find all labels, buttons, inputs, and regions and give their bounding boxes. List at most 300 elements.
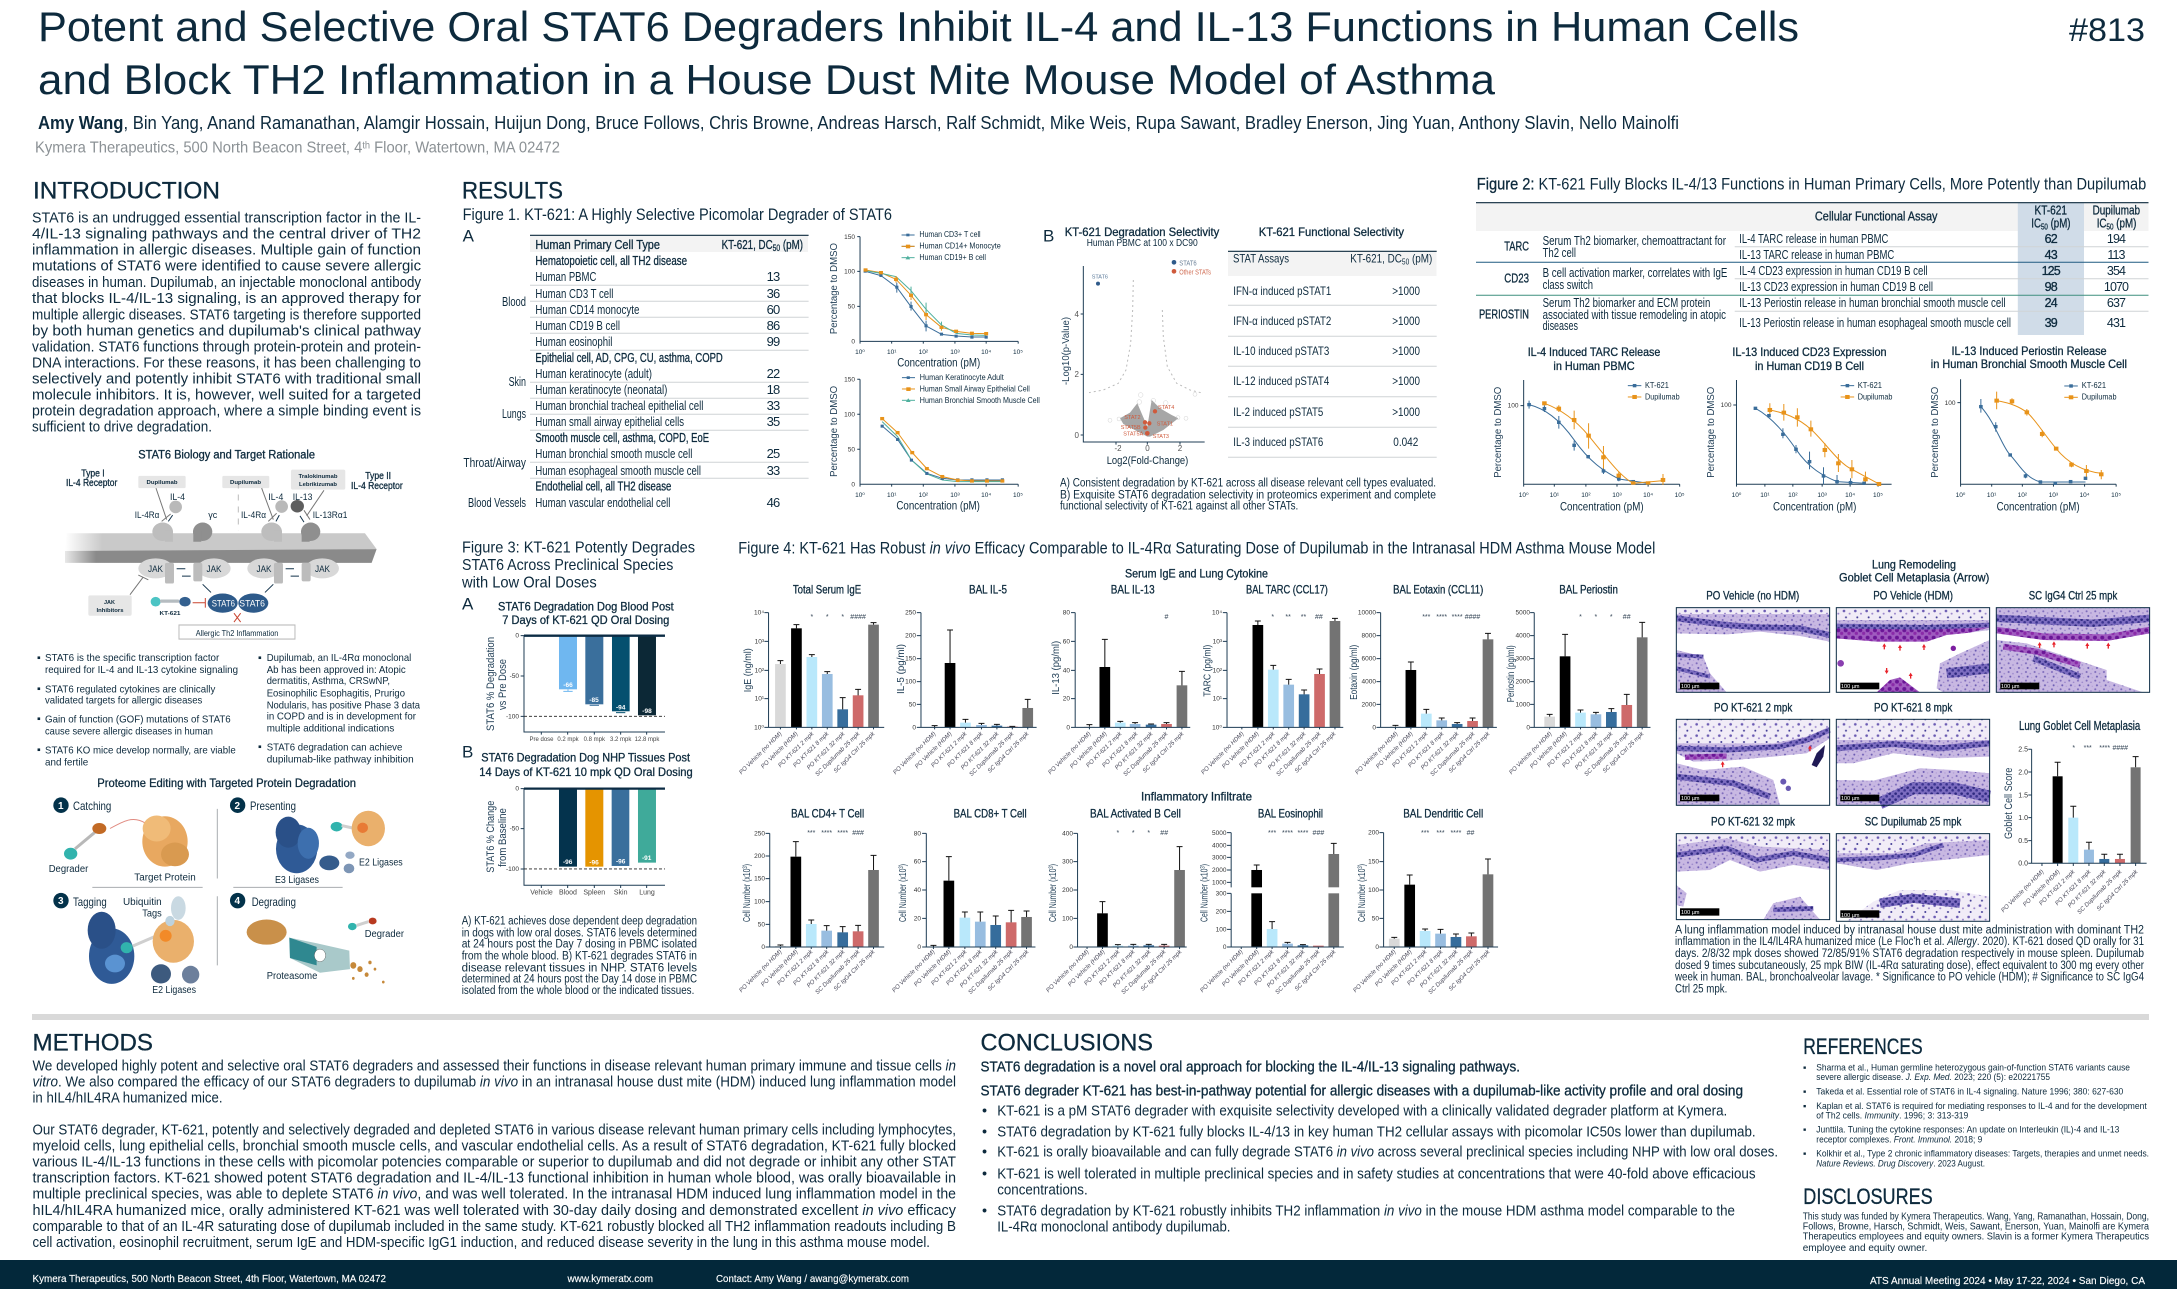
reference list: Takeda et al. Essential role of STAT6 in IL-4 signaling. Nature 1996; 380: 627-630 <box>1816 1087 2123 1098</box>
line chart: blood cell STAT6 degradation: 150 <box>844 234 855 241</box>
affiliation: th <box>362 140 370 152</box>
bar chart: total serum IgE: SC Dupilumab 25 mpk <box>815 730 862 778</box>
diagram: proteome editing with targeted protein degradation <box>49 776 405 996</box>
bar chart: dog blood degradation: -100 <box>506 714 519 720</box>
bar chart: BAL eosinophil with broken axis: **** <box>1282 830 1293 837</box>
bar chart: BAL CD8+ T cell <box>892 806 1035 996</box>
table: human primary cell DC50: Human Primary Cell Type <box>535 237 660 252</box>
panel: conclusions <box>980 1030 1778 1236</box>
figure 3 caption: at 24 hours post the Day 7 dosing in PBMC isolated <box>462 938 697 950</box>
bullet list: STAT6 rationale: ▪ <box>37 683 41 695</box>
figure 1 caption: A) Consistent degradation by KT-621 across all disease relevant cell types evaluated. <box>1060 478 1436 490</box>
histology: PO KT-621 32 mpk: 100 µm <box>1681 910 1700 916</box>
histology: SC Dupilumab 25 mpk <box>1836 815 1990 921</box>
table: cellular functional assays: 113 <box>2107 248 2126 262</box>
table: human primary cell DC50: 36 <box>767 286 780 301</box>
bar chart: BAL CD8+ T cell: 80 <box>914 830 921 837</box>
bar chart: BAL TARC: TARC (pg/ml) <box>1202 645 1214 697</box>
line chart: IL-13 induced periostin release: 10⁴ <box>2079 492 2090 499</box>
table: functional selectivity: >1000 <box>1392 344 1420 358</box>
bullet list: STAT6 rationale: cause severe allergic diseases in human <box>45 726 213 738</box>
bar chart: BAL CD4+ T cell <box>739 806 884 996</box>
table: human primary cell DC50: KT-621, DC <box>722 237 790 252</box>
bar chart: BAL IL-5: PO KT-621 32 mpk <box>960 730 1001 771</box>
diagram: STAT6 biology and target rationale <box>65 450 403 639</box>
line chart: blood cell STAT6 degradation: Percentage to DMSO <box>829 243 840 334</box>
bar chart: BAL eotaxin: PO Vehicle (HDM) <box>1375 731 1414 770</box>
volcano plot: degradation selectivity: 0 <box>1145 444 1150 453</box>
bar chart: BAL CD4+ T cell: *** <box>807 830 816 837</box>
bar chart: BAL eotaxin: #### <box>1465 614 1480 621</box>
bar chart: BAL IL-5: 0 <box>912 724 916 731</box>
bar chart: BAL TARC: ** <box>1285 614 1291 621</box>
line chart: IL-13 induced CD23 expression <box>1706 345 1893 514</box>
diagram: STAT6 biology and target rationale: Lebrikizumab <box>299 482 338 488</box>
table: cellular functional assays: IC <box>2031 216 2044 230</box>
reference list: of Th2 cells. Immunity. 1996; 3: 313-319 <box>1816 1111 1968 1122</box>
bar chart: NHP tissue degradation: -100 <box>506 866 519 873</box>
bar chart: BAL IL-5 <box>893 582 1037 778</box>
table: functional selectivity: KT-621 Functional Selectivity <box>1259 225 1404 239</box>
histology: SC IgG4 Ctrl 25 mpk: SC IgG4 Ctrl 25 mpk <box>2029 589 2118 603</box>
methods text: myeloid cells, lung epithelial cells, bronchial smooth muscle cells, and vascular endothelial cells. As a result of STAT6 degradation, KT-621 fully blocked <box>32 1138 956 1154</box>
table: cellular functional assays: Th2 cell <box>1543 246 1576 260</box>
introduction paragraph: selectively and potently inhibit STAT6 with traditional small <box>32 371 421 387</box>
heading: lung remodeling: Goblet Cell Metaplasia (Arrow) <box>1839 571 1989 585</box>
bar chart: BAL periostin: SC IgG4 Ctrl 25 mpk <box>1602 730 1646 775</box>
bar chart: NHP tissue degradation: STAT6 Degradation Dog NHP Tissues Post <box>481 751 691 765</box>
bar chart: NHP tissue degradation: -50 <box>510 826 519 833</box>
bar chart: total serum IgE: * <box>811 614 814 621</box>
line chart: blood cell STAT6 degradation: 0 <box>851 338 855 346</box>
heading: lung remodeling <box>1839 558 1989 585</box>
bullet list: STAT6 rationale: required for IL-4 and IL-13 cytokine signaling <box>45 664 238 676</box>
figure 3 title: with Low Oral Doses <box>461 574 597 591</box>
diagram: STAT6 biology and target rationale: IL-4 Receptor <box>66 478 118 489</box>
histology: PO KT-621 2 mpk: 100 µm <box>1681 796 1700 802</box>
table: cellular functional assays: IL-13 TARC release in human PBMC <box>1739 248 1894 262</box>
introduction paragraph: sufficient to drive degradation. <box>32 419 212 435</box>
histology: PO KT-621 32 mpk <box>1676 815 1830 920</box>
bar chart: BAL dendritic cell: PO Vehicle (HDM) <box>1374 949 1413 988</box>
line chart: IL-13 induced CD23 expression: 10⁵ <box>1873 492 1883 499</box>
bar chart: BAL CD8+ T cell: PO Vehicle (no HDM) <box>892 949 936 994</box>
bar chart: BAL IL-5: PO KT-621 8 mpk <box>947 730 985 769</box>
reference list: Junttila. Tuning the cytokine responses: An update on Interleukin (IL)-4 and IL-13 <box>1816 1125 2119 1136</box>
table: cellular functional assays: IL-13 CD23 expression in human CD19 B cell <box>1739 280 1933 294</box>
diagram: STAT6 biology and target rationale: STAT6 <box>212 598 235 608</box>
histology: PO vehicle (HDM) <box>1836 589 1990 692</box>
table: human primary cell DC50: Human CD19 B cell <box>535 318 620 333</box>
table: cellular functional assays: 50 <box>2041 222 2048 231</box>
bar chart: BAL periostin: 4000 <box>1516 633 1530 640</box>
bar chart: BAL dendritic cell: 200 <box>1368 830 1379 837</box>
bar chart: BAL dendritic cell: 100 <box>1368 887 1379 894</box>
table: cellular functional assays: 1070 <box>2104 280 2129 294</box>
bar chart: BAL activated B cell: 0 <box>1069 944 1073 951</box>
line chart: IL-13 induced CD23 expression: KT-621 <box>1858 380 1882 390</box>
bar chart: BAL CD4+ T cell: PO KT-621 8 mpk <box>793 948 831 987</box>
bar chart: BAL eosinophil with broken axis: *** <box>1268 830 1276 837</box>
bar chart: total serum IgE <box>739 582 884 778</box>
panel: disclosures <box>1803 1184 2149 1254</box>
table: cellular functional assays: (pM) <box>2048 216 2070 230</box>
bar chart: NHP tissue degradation <box>479 751 693 897</box>
line chart: IL-13 induced CD23 expression: Dupilumab <box>1858 391 1893 401</box>
diagram: STAT6 biology and target rationale: IL-4Rα <box>241 510 266 520</box>
figure 3 caption: A) KT-621 achieves dose dependent deep degradation <box>462 915 697 927</box>
table: functional selectivity: IL-3 induced pSTAT6 <box>1233 435 1324 449</box>
bar chart: BAL CD4+ T cell: SC Dupilumab 25 mpk <box>815 948 862 996</box>
bar chart: lung goblet cell metaplasia: 1.5 <box>2018 792 2028 800</box>
line chart: IL-4 induced TARC release: 10² <box>1581 492 1591 499</box>
line chart: blood cell STAT6 degradation: Human CD3+ T cell <box>919 229 981 239</box>
bar chart: BAL IL-5: IL-5 (pg/ml) <box>896 644 907 694</box>
volcano plot: degradation selectivity: Log2(Fold-Change) <box>1107 455 1188 467</box>
bar chart: dog blood degradation: -94 <box>616 704 626 712</box>
table: human primary cell DC50: Human bronchial tracheal epithelial cell <box>535 398 703 413</box>
bar chart: BAL activated B cell: PO Vehicle (HDM) <box>1067 949 1106 988</box>
bar chart: BAL eotaxin: PO Vehicle (no HDM) <box>1355 731 1399 776</box>
line chart: IL-13 induced CD23 expression: Concentration (pM) <box>1773 500 1856 514</box>
heading: inflammatory infiltrate: Inflammatory Infiltrate <box>1141 790 1252 804</box>
table: cellular functional assays: 354 <box>2107 264 2126 278</box>
reference list: ▪ <box>1803 1063 1806 1074</box>
diagram: proteome editing with targeted protein degradation: 3 <box>58 896 64 907</box>
bar chart: BAL eotaxin: **** <box>1452 614 1463 621</box>
bar chart: BAL IL-13: IL-13 (pg/ml) <box>1051 641 1062 695</box>
conclusions bullet list: STAT6 degradation by KT-621 fully blocks IL-4/13 in key human TH2 cellular assays with picomolar IC50s lower than dupilumab. <box>997 1125 1756 1141</box>
bar chart: BAL eosinophil with broken axis: 300 <box>1216 890 1227 898</box>
bar chart: dog blood degradation: 7 Days of KT-621 QD Oral Dosing <box>502 613 669 627</box>
bar chart: BAL eotaxin: SC IgG4 Ctrl 25 mpk <box>1448 730 1492 775</box>
poster number: #813 <box>2069 12 2145 48</box>
introduction paragraph: molecule inhibitors. It is, however, well suited for a targeted <box>32 387 421 403</box>
bar chart: BAL TARC: 10⁰ <box>1212 724 1222 731</box>
bar chart: BAL activated B cell: Cell Number (x10³) <box>1048 864 1059 922</box>
footer bar: ATS Annual Meeting 2024 • May 17-22, 2024 • San Diego, CA <box>1870 1275 2145 1287</box>
line chart: tissue cell STAT6 degradation: Human Small Airway Epithelial Cell <box>920 383 1030 393</box>
table: functional selectivity: IL-10 induced pSTAT3 <box>1233 344 1330 358</box>
bar chart: BAL eosinophil with broken axis: **** <box>1297 830 1309 837</box>
heading: methods: METHODS <box>32 1030 153 1057</box>
bar chart: BAL periostin: SC Dupilumab 25 mpk <box>1584 730 1631 778</box>
table: cellular functional assays: IL-13 Periostin release in human esophageal smooth muscle cell <box>1739 316 2011 330</box>
conclusions bullet list: • <box>982 1167 987 1183</box>
bar chart: BAL CD4+ T cell: 250 <box>754 830 765 837</box>
heading: conclusions: CONCLUSIONS <box>980 1030 1153 1057</box>
introduction paragraph: by both human genetics and dupilumab's clinical pathway <box>32 323 422 339</box>
panel: figure 2 <box>1476 175 2148 514</box>
bar chart: lung goblet cell metaplasia: * <box>2072 745 2075 752</box>
volcano plot: degradation selectivity: 4 <box>1075 310 1080 319</box>
bar chart: BAL eosinophil with broken axis: 3000 <box>1212 854 1227 862</box>
line chart: IL-13 induced periostin release: Dupilumab <box>2082 392 2117 402</box>
introduction paragraph: STAT6 is an undrugged essential transcription factor in the IL- <box>32 210 421 226</box>
panel: methods <box>32 1030 957 1251</box>
bar chart: BAL IL-5: 100 <box>905 679 916 686</box>
bar chart: BAL CD4+ T cell: 200 <box>754 853 765 860</box>
bullet list: STAT6 rationale: and fertile <box>45 757 88 769</box>
table: cellular functional assays: TARC <box>1504 239 1529 254</box>
table: cellular functional assays: B cell activation marker, correlates with IgE <box>1543 266 1727 280</box>
figure 3 title: STAT6 Across Preclinical Species <box>462 557 673 574</box>
bar chart: NHP tissue degradation: from Baseline <box>497 808 509 867</box>
line chart: tissue cell STAT6 degradation: Concentration (pM) <box>896 498 980 512</box>
conclusions bullet list: KT-621 is well tolerated in multiple preclinical species and in safety studies at concentrations that were 40-fold above efficacious <box>997 1167 1756 1183</box>
bar chart: total serum IgE: 10⁴ <box>754 610 764 617</box>
bar chart: BAL periostin: 2000 <box>1516 679 1530 686</box>
table: cellular functional assays: IL-13 Periostin release in human bronchial smooth muscle cell <box>1739 296 2006 310</box>
bar chart: BAL eosinophil with broken axis: SC IgG4 Ctrl 25 mpk <box>1294 948 1338 993</box>
diagram: STAT6 biology and target rationale: IL-4Rα <box>135 510 159 520</box>
table: cellular functional assays: 431 <box>2107 316 2126 330</box>
table: cellular functional assays: PERIOSTIN <box>1479 307 1529 322</box>
diagram: STAT6 biology and target rationale: STAT6 Biology and Target Rationale <box>138 450 315 462</box>
bullet list: STAT6 rationale: ▪ <box>37 652 41 664</box>
bullet list: STAT6 rationale <box>37 652 420 769</box>
bar chart: BAL TARC: ## <box>1315 614 1323 621</box>
reference list: Sharma et al., Human germline heterozygous gain-of-function STAT6 variants cause <box>1816 1063 2130 1074</box>
line chart: blood cell STAT6 degradation: 10¹ <box>887 349 897 356</box>
table: human primary cell DC50: Blood <box>502 294 526 309</box>
line chart: IL-13 induced periostin release: 10⁵ <box>2111 492 2121 499</box>
bar chart: BAL eosinophil with broken axis <box>1200 806 1344 996</box>
bullet list: STAT6 rationale: Eosinophilic Esophagitis, Prurigo <box>267 687 405 699</box>
table: cellular functional assays: class switch <box>1543 278 1593 292</box>
figure 1 title: Figure 1. KT-621: A Highly Selective Picomolar Degrader of STAT6 <box>463 206 892 224</box>
diagram: STAT6 biology and target rationale: Tralokinumab <box>298 474 338 480</box>
figure 1 caption: functional selectivity of KT-621 against all other STATs. <box>1060 501 1298 513</box>
table: functional selectivity: 0.042 <box>1393 435 1419 449</box>
methods text: Our STAT6 degrader, KT-621, potently and selectively degraded and depleted STAT6 in various disease relevant human primary cells including lymphocytes, <box>32 1122 956 1138</box>
histology: PO vehicle (HDM): 100 µm <box>1841 684 1860 690</box>
bar chart: BAL CD4+ T cell: 50 <box>758 921 765 928</box>
footer bar: www.kymeratx.com <box>567 1273 653 1285</box>
conclusions bullet list <box>982 1104 1778 1236</box>
diagram: STAT6 biology and target rationale: JAK <box>315 564 330 574</box>
diagram: proteome editing with targeted protein degradation: 2 <box>234 801 240 812</box>
bullet list: STAT6 rationale: in COPD and is in development for <box>267 710 416 722</box>
line chart: blood cell STAT6 degradation: 10³ <box>950 349 961 356</box>
volcano plot: degradation selectivity: STAT1 <box>1157 422 1173 428</box>
conclusions bullet list: • <box>982 1204 987 1220</box>
bar chart: BAL eotaxin: Eotaxin (pg/ml) <box>1349 645 1360 700</box>
bar chart: NHP tissue degradation: Vehicle <box>530 890 553 897</box>
introduction paragraph: diseases in human. Dupilumab, an injectable monoclonal antibody <box>32 275 422 291</box>
line chart: tissue cell STAT6 degradation: 10⁴ <box>981 492 991 499</box>
volcano plot: degradation selectivity <box>1060 225 1219 467</box>
bar chart: BAL eotaxin: 4000 <box>1362 679 1376 686</box>
figure 1 caption: B) Exquisite STAT6 degradation selectivity in proteomics experiment and complete <box>1060 490 1436 502</box>
bar chart: dog blood degradation: 0.2 mpk <box>557 737 580 743</box>
diagram: proteome editing with targeted protein degradation: Ubiquitin <box>123 897 162 908</box>
bar chart: lung goblet cell metaplasia: PO KT-621 8 mpk <box>2055 868 2093 907</box>
bar chart: lung goblet cell metaplasia: #### <box>2113 745 2128 752</box>
bullet list: STAT6 rationale: ▪ <box>258 741 262 753</box>
table: human primary cell DC50: Human CD3 T cell <box>535 286 613 301</box>
table: human primary cell DC50: Hematopoietic cell, all TH2 disease <box>535 253 687 268</box>
bar chart: BAL eotaxin <box>1349 582 1497 778</box>
methods text <box>32 1058 957 1251</box>
bullet list: STAT6 rationale: ▪ <box>37 713 41 725</box>
line chart: tissue cell STAT6 degradation: 50 <box>848 446 855 454</box>
diagram: proteome editing with targeted protein degradation: E2 Ligases <box>152 985 196 996</box>
bar chart: dog blood degradation: -85 <box>589 697 599 704</box>
line chart: IL-13 induced periostin release: 10² <box>2018 492 2028 499</box>
bar chart: BAL TARC: PO Vehicle (no HDM) <box>1201 731 1245 776</box>
figure 4 caption <box>1674 924 2145 995</box>
table: cellular functional assays: 98 <box>2045 280 2058 294</box>
figure 4 title: Figure 4: KT-621 Has Robust in vivo Efficacy Comparable to IL-4Rα Saturating Dose of Dupilumab in the Intranasal HDM Asthma Mouse Model <box>738 539 1655 557</box>
line chart: IL-13 induced CD23 expression: Percentage to DMSO <box>1706 387 1717 478</box>
bar chart: NHP tissue degradation: 14 Days of KT-621 10 mpk QD Oral Dosing <box>479 765 693 779</box>
line chart: IL-13 induced periostin release: IL-13 Induced Periostin Release <box>1952 344 2107 358</box>
table: cellular functional assays: 39 <box>2045 316 2058 330</box>
bullet list: STAT6 rationale: STAT6 is the specific transcription factor <box>45 652 220 664</box>
bar chart: lung goblet cell metaplasia: SC IgG4 Ctrl 25 mpk <box>2096 868 2140 913</box>
bar chart: NHP tissue degradation: STAT6 % Change <box>485 801 497 873</box>
bar chart: BAL eosinophil with broken axis: 100 <box>1216 926 1227 934</box>
line chart: IL-13 induced CD23 expression: 10⁴ <box>1845 492 1855 499</box>
line chart: IL-4 induced TARC release: 10¹ <box>1550 492 1560 499</box>
bar chart: BAL eotaxin: PO KT-621 2 mpk <box>1392 730 1430 769</box>
bar chart: BAL IL-13: 40 <box>1063 667 1070 674</box>
table: cellular functional assays: 125 <box>2042 264 2061 278</box>
bar chart: BAL TARC: ** <box>1301 614 1306 621</box>
bar chart: total serum IgE: PO KT-621 2 mpk <box>778 730 816 769</box>
line chart: tissue cell STAT6 degradation <box>829 372 1040 512</box>
bar chart: lung goblet cell metaplasia: PO KT-621 2 mpk <box>2039 868 2077 907</box>
table: human primary cell DC50: Human esophageal smooth muscle cell <box>535 463 701 478</box>
diagram: proteome editing with targeted protein degradation: Presenting <box>250 799 296 813</box>
bar chart: BAL eotaxin: **** <box>1436 614 1447 621</box>
bar chart: lung goblet cell metaplasia: *** <box>2084 745 2092 752</box>
bullet list: STAT6 rationale: ▪ <box>258 652 262 664</box>
bar chart: BAL periostin: ## <box>1623 614 1631 621</box>
bar chart: BAL periostin <box>1506 582 1650 778</box>
bar chart: BAL periostin: Periostin (pg/ml) <box>1506 645 1517 702</box>
table: human primary cell DC50: Human vascular endothelial cell <box>535 495 670 510</box>
bar chart: total serum IgE: PO KT-621 32 mpk <box>806 730 847 771</box>
bar chart: dog blood degradation <box>485 600 674 743</box>
bar chart: BAL dendritic cell: *** <box>1436 830 1445 837</box>
authors: Amy Wang, Bin Yang, Anand Ramanathan, Alamgir Hossain, Huijun Dong, Bruce Follows, Chris Browne, Andreas Harsch, Ralf Schmidt, Mike Weis, Rupa Sawant, Bradley Enerson, Jing Yuan, Anthony Slavin, Nello Mainolfi <box>38 113 1679 133</box>
bar chart: BAL CD8+ T cell: PO KT-621 8 mpk <box>946 948 984 987</box>
bar chart: BAL activated B cell: 200 <box>1062 887 1073 894</box>
title <box>38 3 1799 103</box>
bar chart: BAL eosinophil with broken axis: 200 <box>1216 908 1227 916</box>
conclusions bullet list: • <box>982 1145 987 1161</box>
bar chart: BAL dendritic cell: *** <box>1421 830 1429 837</box>
bar chart: BAL CD4+ T cell: **** <box>837 830 848 837</box>
bar chart: BAL IL-13: PO KT-621 32 mpk <box>1114 730 1155 771</box>
table: cellular functional assays: 43 <box>2045 248 2058 262</box>
diagram: proteome editing with targeted protein degradation: Degrading <box>252 895 296 909</box>
diagram: STAT6 biology and target rationale: IL-13 <box>293 492 312 502</box>
bar chart: BAL activated B cell <box>1046 806 1187 996</box>
line chart: blood cell STAT6 degradation: 10² <box>919 349 929 356</box>
bar chart: total serum IgE: SC IgG4 Ctrl 25 mpk <box>833 730 877 775</box>
bar chart: BAL periostin: * <box>1595 614 1598 621</box>
bar chart: BAL eosinophil with broken axis: ### <box>1313 830 1324 837</box>
diagram: proteome editing with targeted protein degradation: Target Protein <box>134 872 196 883</box>
bullet list: STAT6 rationale: dermatitis, Asthma, CRSwNP, <box>267 675 390 687</box>
bar chart: total serum IgE: PO KT-621 8 mpk <box>793 730 831 769</box>
conclusions bullet list: concentrations. <box>997 1183 1088 1199</box>
line chart: IL-13 induced periostin release: in Human Bronchial Smooth Muscle Cell <box>1931 357 2127 371</box>
table: human primary cell DC50: 25 <box>767 446 780 461</box>
line chart: IL-13 induced periostin release: Percentage to DMSO <box>1930 387 1941 478</box>
line chart: IL-4 induced TARC release: Dupilumab <box>1645 391 1680 401</box>
introduction paragraph: DNA interactions. For these reasons, it has been challenging to <box>32 355 421 371</box>
bar chart: dog blood degradation: -66 <box>563 682 573 689</box>
bar chart: BAL eosinophil with broken axis: PO KT-621 32 mpk <box>1266 948 1307 989</box>
table: human primary cell DC50: 86 <box>767 318 780 333</box>
bar chart: BAL eotaxin: 0 <box>1372 724 1376 731</box>
bar chart: NHP tissue degradation: Blood <box>559 890 577 897</box>
bar chart: BAL CD8+ T cell: PO Vehicle (HDM) <box>913 949 952 988</box>
line chart: tissue cell STAT6 degradation: Human Keratinocyte Adult <box>920 372 1004 382</box>
line chart: IL-13 induced CD23 expression: 10² <box>1788 492 1798 499</box>
bar chart: lung goblet cell metaplasia: 2.5 <box>2018 747 2028 754</box>
reference list: Nature Reviews. Drug Discovery. 2023 August. <box>1816 1159 1985 1170</box>
bar chart: BAL activated B cell: PO KT-621 2 mpk <box>1084 948 1122 987</box>
table: human primary cell DC50: 18 <box>767 382 780 397</box>
table: functional selectivity: STAT Assays <box>1233 252 1289 266</box>
table: cellular functional assays: CD23 <box>1504 271 1529 286</box>
volcano plot: degradation selectivity: 2 <box>1075 370 1080 379</box>
table: human primary cell DC50: 46 <box>767 495 780 510</box>
disclosures text <box>1803 1211 2149 1254</box>
diagram: STAT6 biology and target rationale: STAT6 <box>239 598 265 608</box>
bar chart: BAL CD8+ T cell: PO KT-621 32 mpk <box>959 948 1000 989</box>
bar chart: NHP tissue degradation: Skin <box>614 890 628 897</box>
bar chart: NHP tissue degradation: -96 <box>563 859 573 866</box>
methods text: transcription factors. KT-621 showed potent STAT6 degradation and IL-4/IL-13 functional inhibition in human whole blood, was orally bioavailable in <box>32 1170 956 1186</box>
bar chart: BAL dendritic cell <box>1353 806 1498 996</box>
table: human primary cell DC50: Human keratinocyte (adult) <box>535 366 652 381</box>
diagram: STAT6 biology and target rationale: JAK <box>206 564 222 574</box>
volcano plot: degradation selectivity: 0 <box>1075 431 1080 440</box>
bar chart: BAL TARC: SC Dupilumab 25 mpk <box>1276 730 1323 778</box>
table: human primary cell DC50: Human eosinophil <box>535 334 612 349</box>
methods text: hIL4/hIL4RA humanized mice, orally administered KT-621 was well tolerated with 30-day daily dosing and demonstrated excellent in vivo efficacy <box>32 1203 957 1219</box>
bar chart: BAL CD8+ T cell: Cell Number (x10³) <box>898 864 909 922</box>
bar chart: dog blood degradation: 12.8 mpk <box>635 737 660 743</box>
line chart: blood cell STAT6 degradation: Concentration (pM) <box>897 356 980 370</box>
bar chart: BAL periostin: PO Vehicle (no HDM) <box>1509 731 1553 776</box>
line chart: IL-4 induced TARC release: 10⁴ <box>1643 492 1653 499</box>
figure 3 caption: from the whole blood. B) KT-621 degrades STAT6 in <box>462 950 697 962</box>
histology: PO vehicle (HDM): PO Vehicle (HDM) <box>1873 589 1953 603</box>
table: cellular functional assays: Dupilumab <box>2093 204 2140 218</box>
bar chart: lung goblet cell metaplasia: **** <box>2099 745 2110 752</box>
volcano plot: degradation selectivity: STAT2 <box>1124 415 1141 421</box>
bullet list: STAT6 rationale: dupilumab-like pathway inhibition <box>267 754 414 766</box>
bar chart: BAL dendritic cell: **** <box>1450 830 1462 837</box>
bar chart: total serum IgE: 10⁰ <box>754 724 764 731</box>
diagram: proteome editing with targeted protein degradation: Degrader <box>365 929 405 940</box>
introduction paragraph: validation. STAT6 functions through protein-protein and protein- <box>32 339 421 355</box>
introduction paragraph: protein degradation approach, where a simple binding event is <box>32 403 421 419</box>
line chart: IL-13 induced periostin release: 10¹ <box>1987 492 1997 499</box>
volcano plot: degradation selectivity: -2 <box>1114 444 1122 453</box>
table: human primary cell DC50: 60 <box>767 302 780 317</box>
line chart: tissue cell STAT6 degradation: 10⁵ <box>1013 492 1023 499</box>
conclusions lead statements: STAT6 degrader KT-621 has best-in-pathway potential for allergic diseases with a dupilumab-like activity profile and oral dosing <box>980 1084 1743 1100</box>
table: functional selectivity: >1000 <box>1392 374 1420 388</box>
